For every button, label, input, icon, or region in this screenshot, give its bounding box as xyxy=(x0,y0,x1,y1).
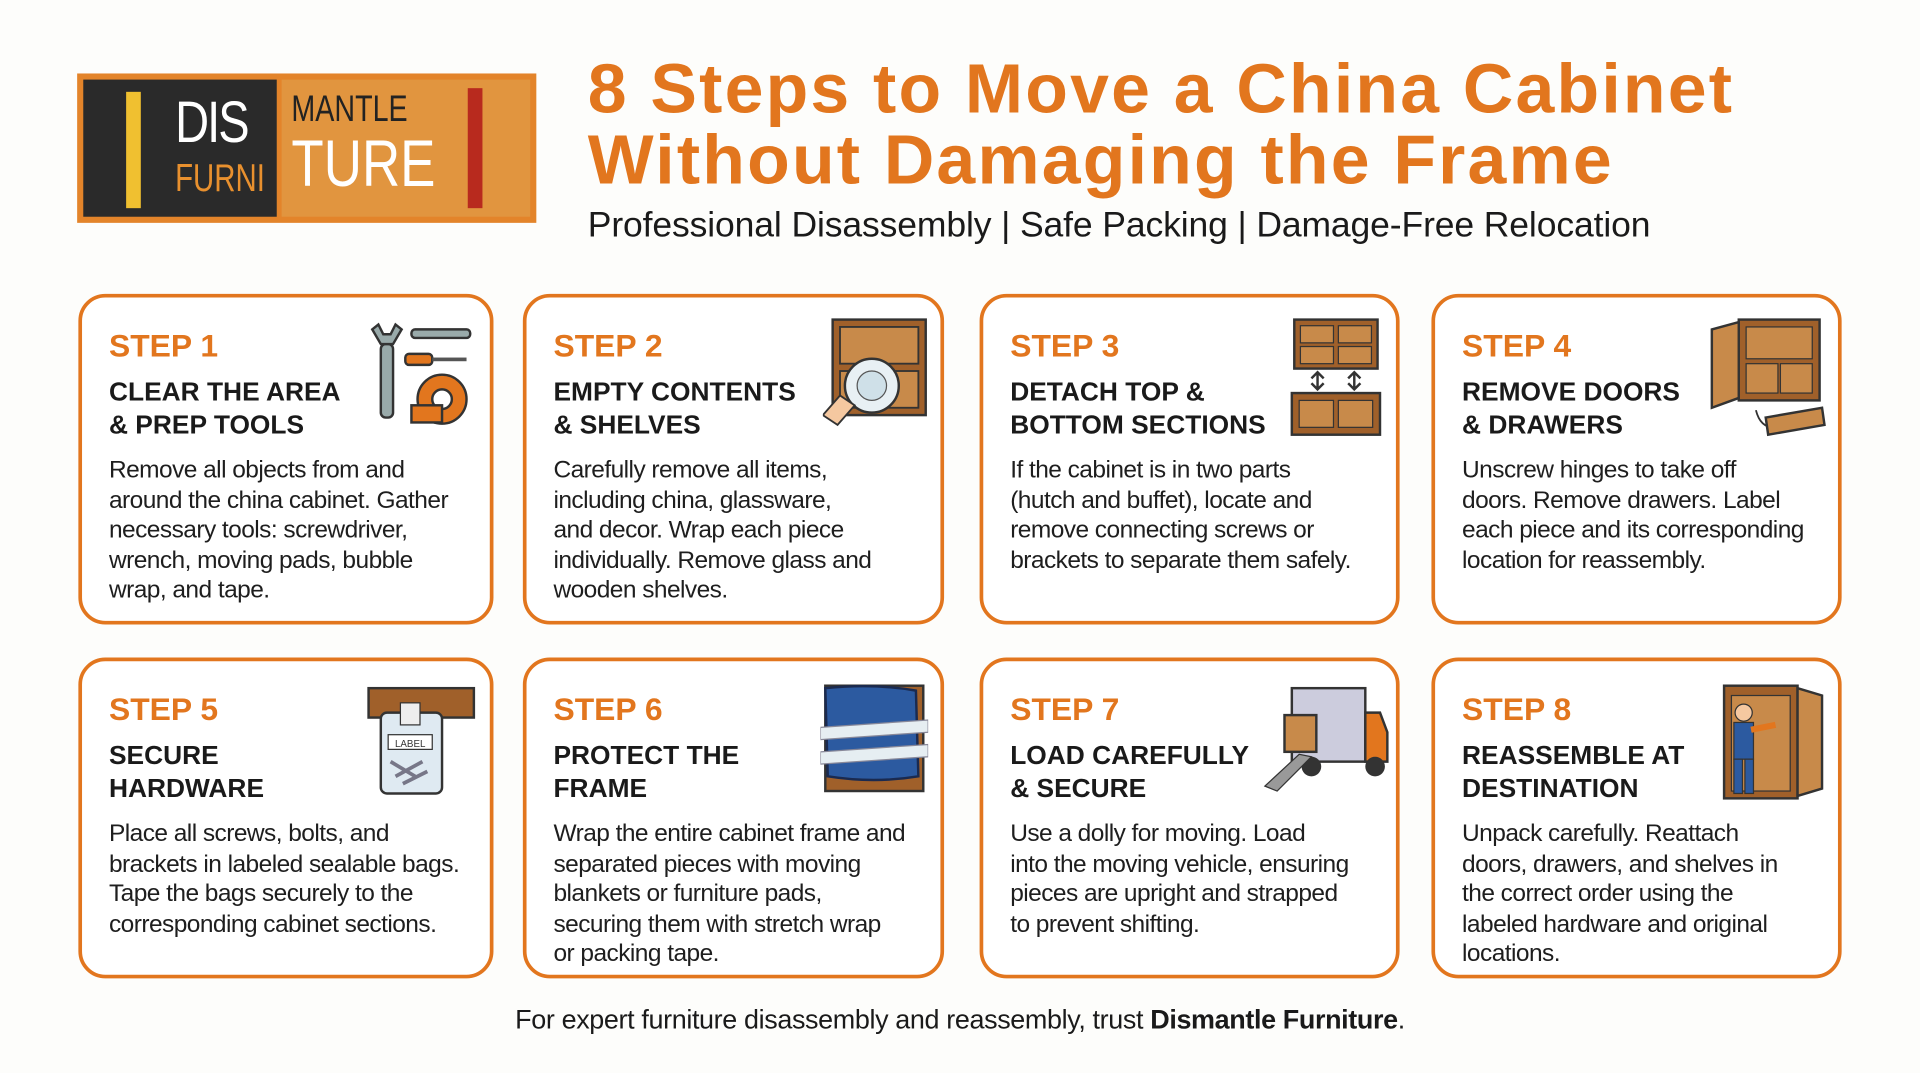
title xyxy=(588,50,1734,200)
card: step 4 xyxy=(1431,294,1842,624)
card: step 6: securing them with stretch wrap xyxy=(553,911,881,938)
card: step 7: LOAD CAREFULLY xyxy=(1010,741,1249,770)
card: step 5: Tape the bags securely to the xyxy=(109,881,413,908)
card: step 6: Wrap the entire cabinet frame and xyxy=(553,820,905,847)
card: step 5: Place all screws, bolts, and xyxy=(109,820,389,847)
card: step 8 xyxy=(1431,658,1842,978)
card: step 2: & SHELVES xyxy=(553,410,701,440)
logo orange panel: MANTLE xyxy=(291,89,408,130)
card: step 4: STEP 4 xyxy=(1462,327,1571,364)
title: 8 Steps to Move a China Cabinet xyxy=(588,50,1734,129)
subtitle: Professional Disassembly | Safe Packing | Damage-Free Relocation xyxy=(588,206,1650,245)
title: Without Damaging the Frame xyxy=(588,121,1614,200)
card: step 4: REMOVE DOORS xyxy=(1462,377,1680,407)
card: step 3: If the cabinet is in two parts xyxy=(1010,457,1290,484)
card: step 1: & PREP TOOLS xyxy=(109,410,304,440)
icon: cabinet with plate xyxy=(822,318,927,426)
card: step 6: STEP 6 xyxy=(553,691,663,727)
card: step 2: EMPTY CONTENTS xyxy=(553,377,796,407)
card: step 3: DETACH TOP & xyxy=(1010,377,1205,407)
card: step 5: brackets in labeled sealable bags. xyxy=(109,851,459,877)
card: step 3: remove connecting screws or xyxy=(1010,517,1314,544)
card: step 7: & SECURE xyxy=(1010,774,1146,803)
card: step 8: DESTINATION xyxy=(1462,774,1639,803)
card: step 1: necessary tools: screwdriver, xyxy=(109,517,407,544)
card: step 6: PROTECT THE xyxy=(553,741,739,770)
card: step 5 xyxy=(78,658,493,978)
card: step 6: blankets or furniture pads, xyxy=(553,881,822,908)
card: step 1: Remove all objects from and xyxy=(109,457,404,484)
card: step 1: CLEAR THE AREA xyxy=(109,377,341,407)
card: step 5: corresponding cabinet sections. xyxy=(109,911,436,938)
icon: tools xyxy=(370,322,472,425)
icon: hardware bag: LABEL xyxy=(395,739,426,750)
logo dark panel: DIS xyxy=(175,91,248,156)
card: step 1 xyxy=(78,294,493,624)
card: step 2: and decor. Wrap each piece xyxy=(553,517,844,544)
icon: moving truck xyxy=(1264,686,1389,792)
card: step 8: STEP 8 xyxy=(1462,691,1571,727)
logo orange panel xyxy=(282,80,530,217)
card: step 6: separated pieces with moving xyxy=(553,851,861,877)
card: step 1: around the china cabinet. Gather xyxy=(109,487,448,514)
card: step 3 xyxy=(980,294,1400,624)
card: step 2 xyxy=(523,294,944,624)
logo dark panel: FURNI xyxy=(175,156,265,200)
card: step 4: each piece and its corresponding xyxy=(1462,517,1804,544)
icon: wrapped cabinet xyxy=(820,684,928,792)
icon: worker at cabinet xyxy=(1722,684,1824,800)
card: step 3: STEP 3 xyxy=(1010,327,1119,364)
card: step 1: STEP 1 xyxy=(109,327,218,364)
card: step 4: Unscrew hinges to take off xyxy=(1462,457,1736,484)
footer: For expert furniture disassembly and reassembly, trust Dismantle Furniture. xyxy=(515,1004,1405,1035)
card: step 2: individually. Remove glass and xyxy=(553,547,871,574)
card: step 8: doors, drawers, and shelves in xyxy=(1462,851,1778,877)
card: step 4: location for reassembly. xyxy=(1462,547,1706,574)
card: step 8: labeled hardware and original xyxy=(1462,911,1767,938)
card: step 8: REASSEMBLE AT xyxy=(1462,741,1684,770)
card: step 1: wrap, and tape. xyxy=(109,577,270,604)
card: step 8: locations. xyxy=(1462,941,1560,968)
card: step 7: pieces are upright and strapped xyxy=(1010,881,1338,908)
card: step 3: brackets to separate them safely. xyxy=(1010,547,1351,574)
card: step 1: wrench, moving pads, bubble xyxy=(109,547,413,574)
card: step 5: SECURE xyxy=(109,741,219,770)
card: step 2: including china, glassware, xyxy=(553,487,831,514)
card: step 6: FRAME xyxy=(553,774,647,803)
icon: hardware bag xyxy=(367,686,476,795)
card: step 2: wooden shelves. xyxy=(553,577,728,604)
logo orange panel: TURE xyxy=(291,127,435,201)
card: step 3: (hutch and buffet), locate and xyxy=(1010,487,1312,514)
card: step 6 xyxy=(523,658,944,978)
card: step 7: Use a dolly for moving. Load xyxy=(1010,820,1305,847)
card: step 5: STEP 5 xyxy=(109,691,218,727)
card: step 8: the correct order using the xyxy=(1462,881,1733,908)
card: step 2: Carefully remove all items, xyxy=(553,457,827,484)
card: step 7 xyxy=(980,658,1400,978)
card: step 6: or packing tape. xyxy=(553,941,719,968)
card: step 3: BOTTOM SECTIONS xyxy=(1010,410,1266,440)
card: step 7: to prevent shifting. xyxy=(1010,911,1199,938)
logo dark panel xyxy=(83,80,277,217)
card: step 4: doors. Remove drawers. Label xyxy=(1462,487,1780,514)
icon: cabinet with door and drawer xyxy=(1710,318,1826,436)
card: step 7: STEP 7 xyxy=(1010,691,1119,727)
icon: two-part cabinet xyxy=(1290,318,1382,436)
logo xyxy=(77,73,536,223)
card: step 5: HARDWARE xyxy=(109,774,264,803)
card: step 7: into the moving vehicle, ensuring xyxy=(1010,851,1349,877)
card: step 8: Unpack carefully. Reattach xyxy=(1462,820,1739,847)
card: step 4: & DRAWERS xyxy=(1462,410,1623,440)
card: step 2: STEP 2 xyxy=(553,327,663,364)
